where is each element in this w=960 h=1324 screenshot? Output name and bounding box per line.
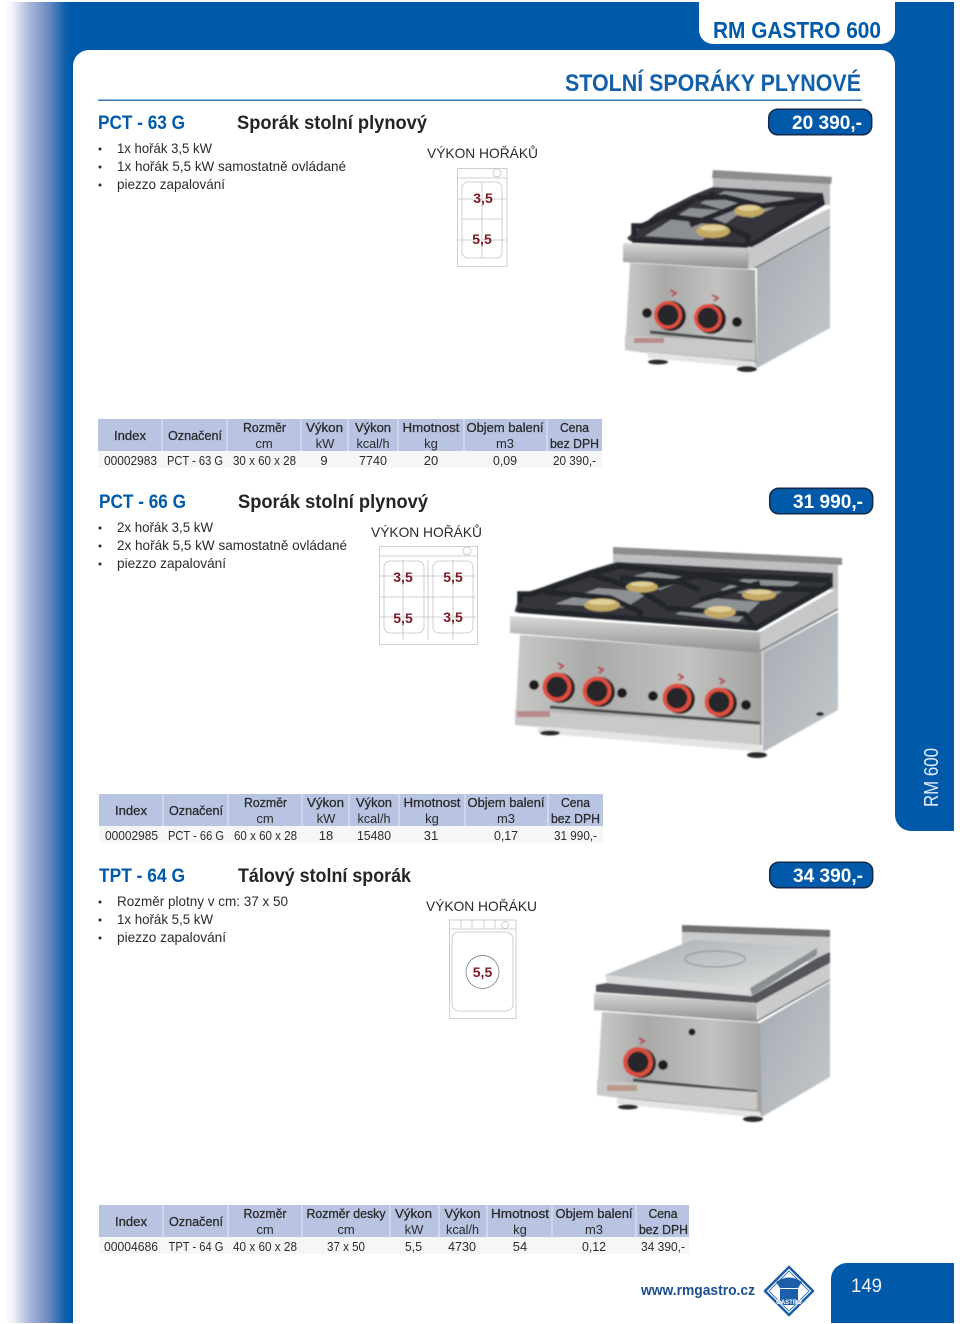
specification table: 37 x 50 <box>327 1239 365 1254</box>
specification table: kW <box>405 1222 424 1237</box>
specification table: bez DPH <box>550 436 599 451</box>
specification table: 31 <box>424 828 438 843</box>
specification table: 5,5 <box>405 1239 422 1254</box>
specification table: kcal/h <box>446 1222 479 1237</box>
specification table: Hmotnost <box>491 1206 549 1221</box>
burner diagram: 3,5 <box>473 190 493 206</box>
specification table: m3 <box>496 436 514 451</box>
specification table: Označení <box>168 428 222 443</box>
feature list <box>98 893 288 945</box>
burner diagram <box>450 920 516 1018</box>
specification table: Cena <box>560 420 590 435</box>
specification table: 54 <box>513 1239 527 1254</box>
product name: Sporák stolní plynový <box>237 113 427 134</box>
specification table: 34 390,- <box>641 1239 685 1254</box>
specification table: TPT - 64 G <box>168 1239 224 1254</box>
specification table: kW <box>316 436 335 451</box>
price badge: 20 390,- <box>792 113 862 134</box>
specification table: Výkon <box>307 795 344 810</box>
specification table: 00002985 <box>105 828 158 843</box>
burner diagram: 3,5 <box>443 609 463 625</box>
price badge <box>769 109 872 135</box>
specification table: Výkon <box>356 795 392 810</box>
burner diagram: 5,5 <box>443 569 463 585</box>
stove photo: four burners <box>510 547 842 758</box>
specification table: Hmotnost <box>402 420 460 435</box>
panel: TPT - 64 G <box>98 862 873 1254</box>
specification table: 15480 <box>357 828 391 843</box>
feature list: 2x hořák 5,5 kW samostatně ovládané <box>117 537 347 553</box>
specification table: Objem balení <box>466 420 544 435</box>
right side tab: RM 600: RM 600 <box>921 748 943 807</box>
specification table: Výkon <box>306 420 343 435</box>
stove photo: two burners <box>623 170 832 372</box>
model heading: PCT - 66 G <box>99 492 186 513</box>
model heading: PCT - 63 G <box>98 113 185 134</box>
feature list: Rozměr plotny v cm: 37 x 50 <box>117 893 288 909</box>
burner power heading: VÝKON HOŘÁKŮ <box>371 523 482 540</box>
specification table: PCT - 63 G <box>167 453 223 468</box>
brand tab: RM GASTRO 600 <box>699 2 895 44</box>
specification table: Cena <box>648 1206 678 1221</box>
specification table: cm <box>337 1222 355 1237</box>
specification table <box>98 419 602 468</box>
specification table: 00004686 <box>104 1239 158 1254</box>
specification table: 18 <box>319 828 333 843</box>
feature list: 1x hořák 5,5 kW samostatně ovládané <box>117 158 346 174</box>
specification table: kcal/h <box>358 811 390 826</box>
specification table: Označení <box>169 803 223 818</box>
price badge <box>770 488 873 514</box>
specification table: m3 <box>585 1222 603 1237</box>
specification table: Rozměr desky <box>306 1206 386 1221</box>
feature list: 1x hořák 5,5 kW <box>117 911 214 927</box>
specification table: Objem balení <box>556 1206 633 1221</box>
specification table <box>99 794 603 843</box>
burner diagram <box>380 546 478 644</box>
specification table: Výkon <box>395 1206 432 1221</box>
specification table: 0,12 <box>582 1239 606 1254</box>
feature list: piezzo zapalování <box>117 555 226 571</box>
specification table: Výkon <box>444 1206 480 1221</box>
specification table: 7740 <box>359 453 387 468</box>
panel: PCT - 66 G <box>98 488 873 843</box>
specification table: 0,09 <box>493 453 517 468</box>
icon: RM Gastro logo: GASTRO <box>776 1300 802 1306</box>
specification table: bez DPH <box>551 811 600 826</box>
website address: www.rmgastro.cz <box>640 1283 755 1299</box>
specification table <box>99 1205 689 1254</box>
burner diagram: 5,5 <box>473 964 492 980</box>
feature list <box>98 140 346 192</box>
specification table: Označení <box>169 1214 223 1229</box>
specification table: kg <box>425 811 439 826</box>
specification table: bez DPH <box>639 1222 688 1237</box>
burner diagram <box>458 168 507 266</box>
panel: PCT - 63 G <box>98 109 872 468</box>
specification table: Rozměr <box>243 420 287 435</box>
specification table: Rozměr <box>244 1206 287 1221</box>
stove photo: solid top <box>594 925 830 1122</box>
price badge <box>770 862 873 888</box>
burner diagram: 3,5 <box>393 569 413 585</box>
specification table: 00002983 <box>104 453 157 468</box>
specification table: Hmotnost <box>404 795 461 810</box>
specification table: cm <box>255 436 273 451</box>
brand tab: RM GASTRO 600: RM GASTRO 600 <box>713 17 881 43</box>
specification table: kW <box>317 811 336 826</box>
specification table: Index <box>115 1214 147 1229</box>
specification table: Cena <box>561 795 591 810</box>
model heading: TPT - 64 G <box>99 866 185 887</box>
feature list: 1x hořák 3,5 kW <box>117 140 213 156</box>
specification table: 20 <box>424 453 438 468</box>
specification table: kg <box>424 436 438 451</box>
specification table: Rozměr <box>244 795 288 810</box>
specification table: kg <box>513 1222 527 1237</box>
specification table: PCT - 66 G <box>168 828 224 843</box>
burner diagram: 5,5 <box>472 231 492 247</box>
specification table: 40 x 60 x 28 <box>233 1239 297 1254</box>
specification table: 20 390,- <box>553 453 596 468</box>
page title: STOLNÍ SPORÁKY PLYNOVÉ <box>565 69 861 97</box>
burner power heading: VÝKON HOŘÁKU <box>426 898 537 914</box>
right side tab: RM 600 <box>895 64 954 831</box>
specification table: Objem balení <box>468 795 545 810</box>
specification table: Index <box>115 803 147 818</box>
feature list: 2x hořák 3,5 kW <box>117 519 214 535</box>
specification table: 4730 <box>448 1239 476 1254</box>
burner diagram: 5,5 <box>393 610 413 626</box>
product name: Sporák stolní plynový <box>238 492 428 513</box>
specification table: cm <box>256 1222 274 1237</box>
specification table: 9 <box>320 453 328 468</box>
feature list <box>98 519 347 571</box>
specification table: kcal/h <box>356 436 390 451</box>
burner power heading: VÝKON HOŘÁKŮ <box>427 144 538 161</box>
feature list: piezzo zapalování <box>117 929 226 945</box>
specification table: 60 x 60 x 28 <box>234 828 297 843</box>
page number tab: 149 <box>851 1275 882 1297</box>
icon: RM Gastro logo <box>765 1267 813 1315</box>
price badge: 34 390,- <box>793 866 863 887</box>
product name: Tálový stolní sporák <box>238 866 411 887</box>
specification table: cm <box>256 811 274 826</box>
price badge: 31 990,- <box>793 492 863 513</box>
feature list: piezzo zapalování <box>117 176 225 192</box>
specification table: Výkon <box>355 420 391 435</box>
page number tab <box>831 1263 954 1323</box>
specification table: 0,17 <box>494 828 518 843</box>
specification table: Index <box>114 428 146 443</box>
specification table: 30 x 60 x 28 <box>233 453 296 468</box>
specification table: 31 990,- <box>554 828 597 843</box>
specification table: m3 <box>497 811 515 826</box>
